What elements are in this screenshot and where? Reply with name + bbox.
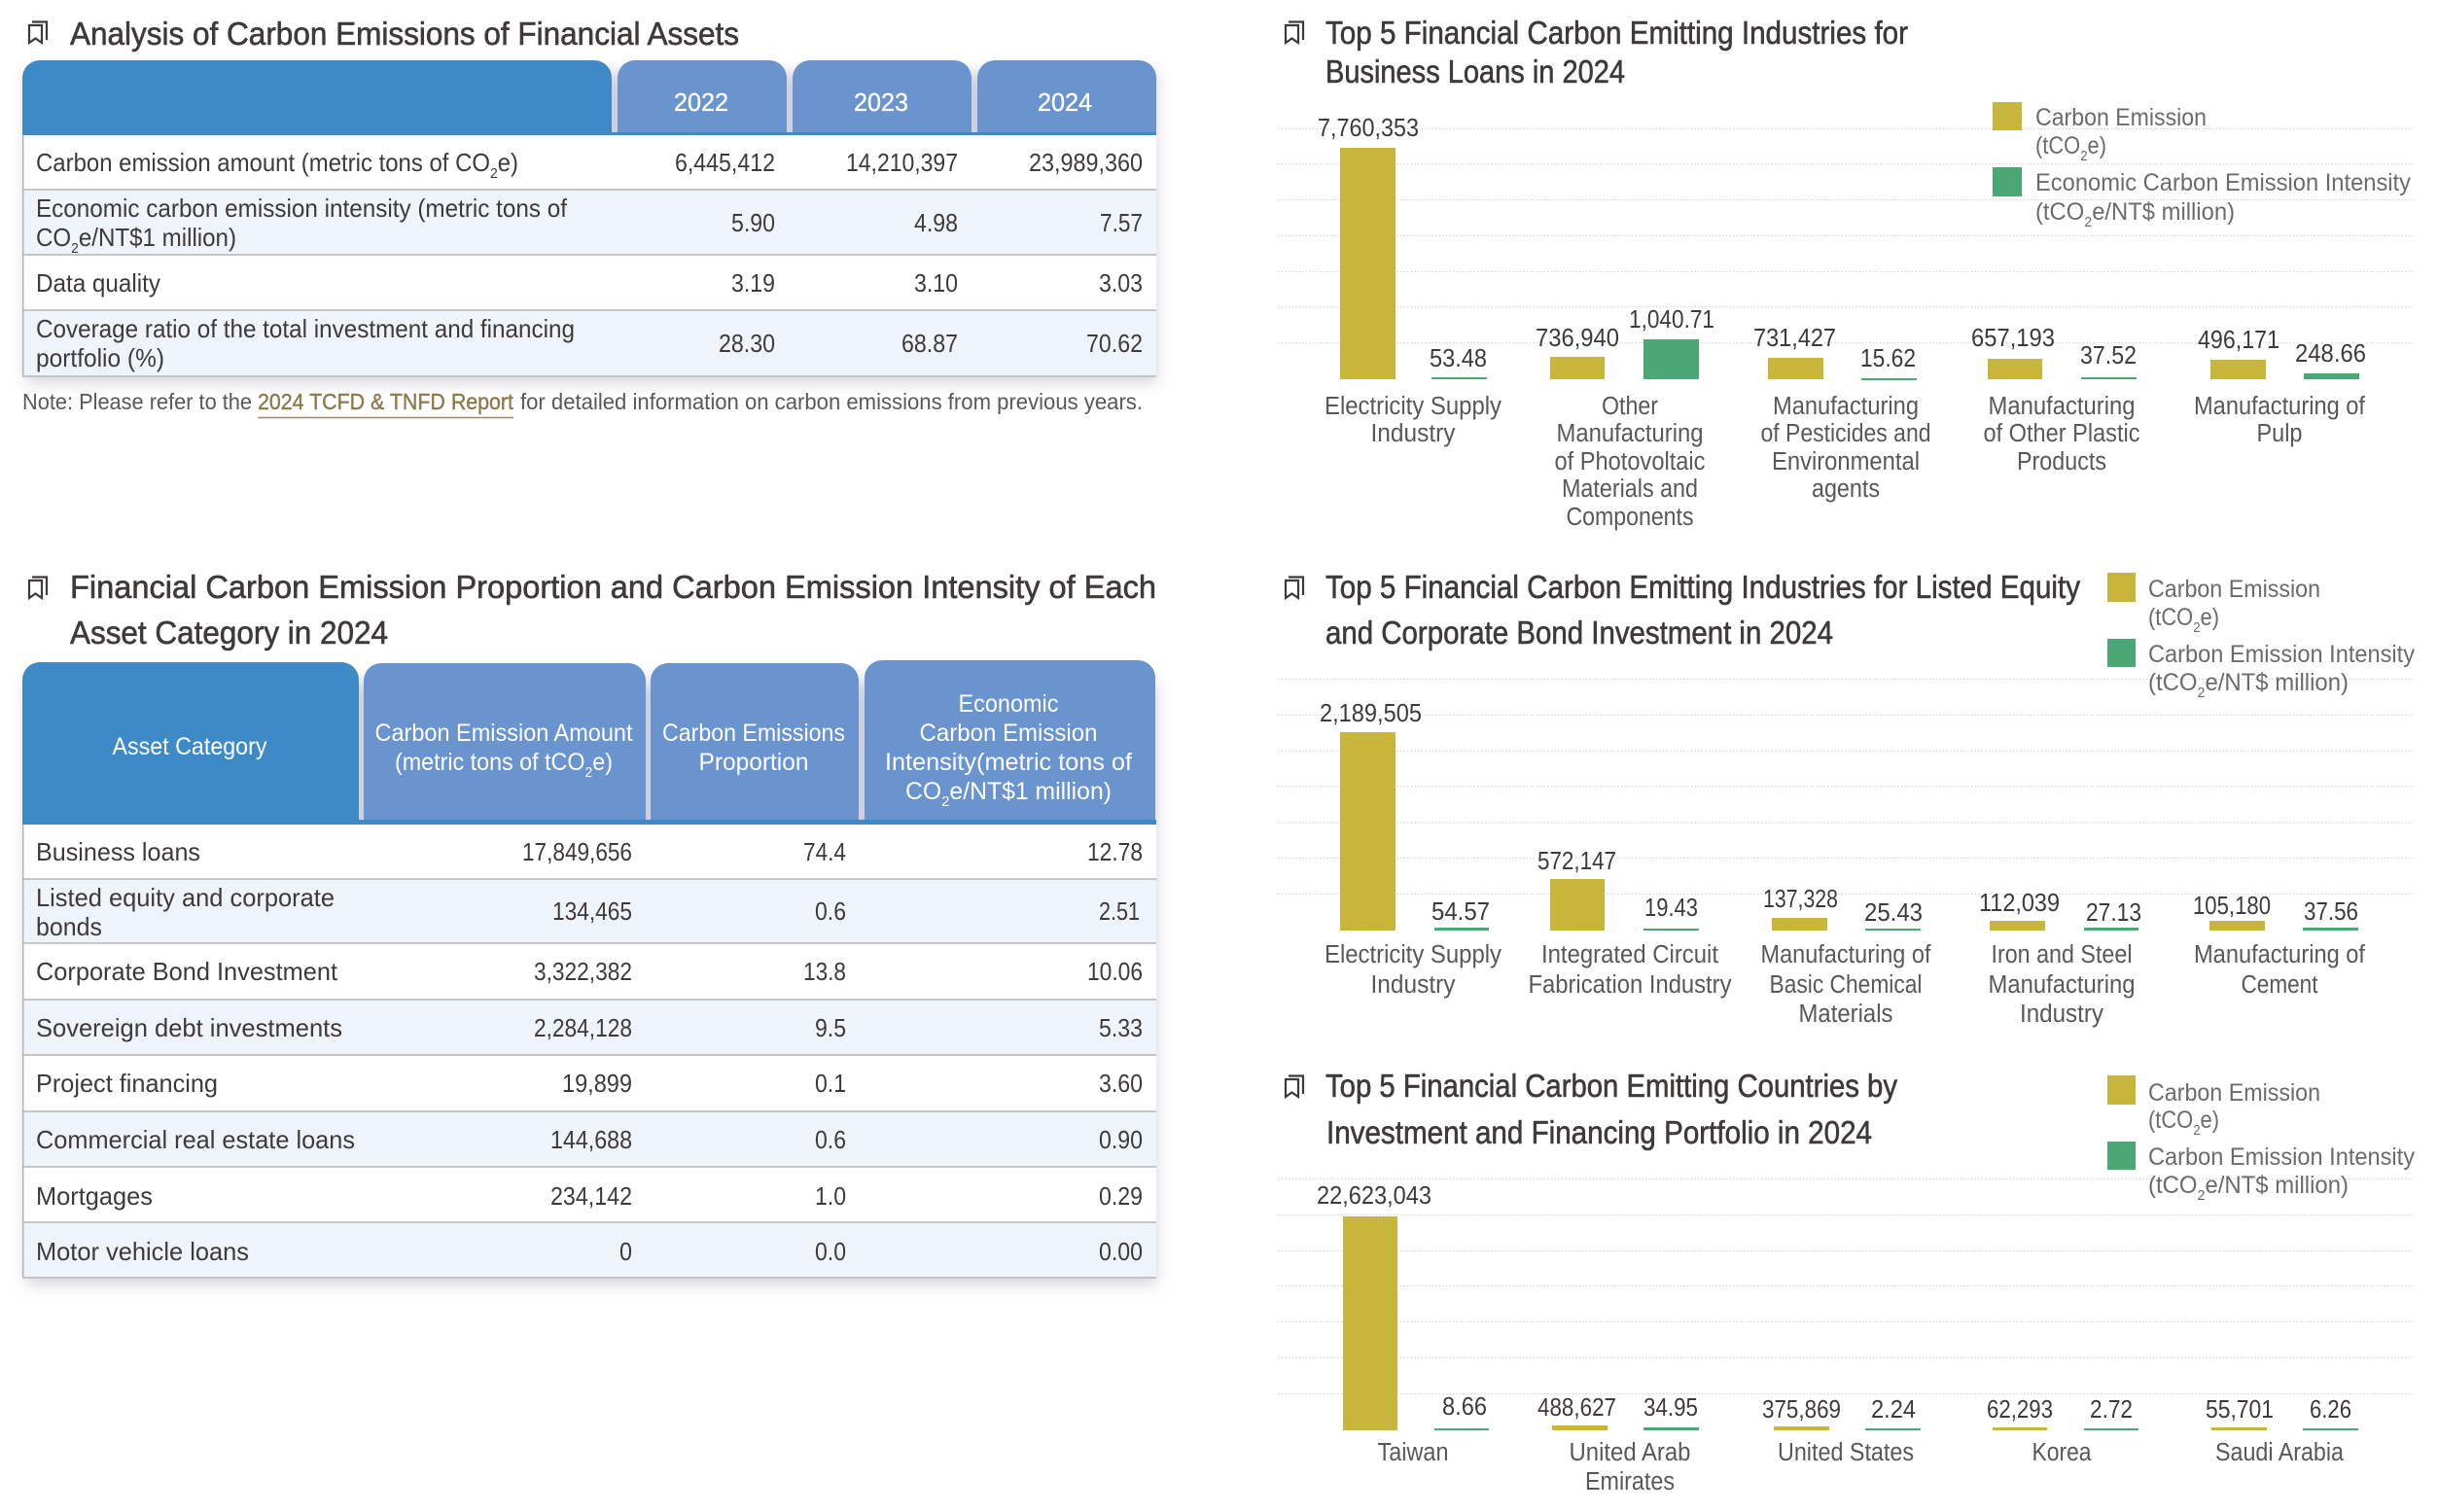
table header row: Carbon Emission Amount bbox=[375, 720, 633, 747]
bars: basic chemical materials: Manufacturing of bbox=[1760, 941, 1931, 968]
legend: Carbon Emission bbox=[2148, 576, 2320, 603]
panel: top 5 industries for business loans bbox=[1278, 15, 2413, 531]
row: commercial real estate loans bbox=[22, 1111, 1156, 1167]
bars: iron and steel: Industry bbox=[2020, 1001, 2103, 1028]
legend: e) bbox=[2201, 1107, 2219, 1134]
legend: 2 bbox=[2080, 148, 2088, 164]
table header row: 2 bbox=[941, 793, 949, 810]
row: corporate bond investment bbox=[22, 943, 1156, 1000]
row: corporate bond investment: 10.06 bbox=[1087, 957, 1143, 986]
bars: photovoltaic materials: Materials and bbox=[1562, 475, 1698, 503]
bars: electricity supply industry bbox=[1320, 698, 1502, 999]
row: commercial real estate loans: 144,688 bbox=[550, 1125, 632, 1154]
legend: (tCO bbox=[2148, 1107, 2200, 1134]
row: economic carbon emission intensity: CO bbox=[36, 223, 74, 252]
table header row: 2 bbox=[585, 764, 592, 781]
table header row: 2022 bbox=[674, 88, 728, 117]
note: report reference: for detailed information on carbon emissions from previous years. bbox=[520, 389, 1143, 414]
bars: integrated circuit fabrication bbox=[1529, 846, 1732, 999]
row: carbon emission amount: 6,445,412 bbox=[675, 148, 775, 177]
legend: (tCO bbox=[2148, 1172, 2200, 1199]
bars: integrated circuit fabrication: Fabrication Industry bbox=[1529, 971, 1732, 999]
row: commercial real estate loans: 0.6 bbox=[815, 1125, 846, 1154]
row: carbon emission amount: e) bbox=[498, 148, 518, 177]
row: coverage ratio: portfolio (%) bbox=[36, 343, 164, 372]
bars: cement: 37.56 bbox=[2304, 897, 2358, 926]
bars: pesticides and environmental agents: Manufacturing bbox=[1773, 393, 1919, 420]
bars: photovoltaic materials: 736,940 bbox=[1536, 323, 1619, 352]
legend: e/NT$ million) bbox=[2092, 198, 2235, 226]
row: business loans: Business loans bbox=[36, 837, 200, 866]
legend: (tCO bbox=[2035, 132, 2087, 159]
table header row: e) bbox=[592, 749, 613, 776]
bars: basic chemical materials: 25.43 bbox=[1864, 897, 1923, 927]
bars: iron and steel bbox=[1979, 888, 2141, 1028]
bars: united arab emirates: Emirates bbox=[1585, 1468, 1675, 1495]
table header row: (metric tons of tCO bbox=[395, 749, 599, 776]
row: mortgages: Mortgages bbox=[36, 1181, 153, 1211]
legend: (tCO bbox=[2148, 604, 2200, 631]
table header row: Intensity(metric tons of bbox=[885, 749, 1132, 776]
legend: Carbon Emission bbox=[2148, 1079, 2320, 1107]
icon: bookmark bbox=[29, 578, 47, 598]
row: listed equity and corporate bonds: 0.6 bbox=[815, 897, 846, 926]
heading: proportion and intensity: Asset Category in 2024 bbox=[70, 615, 388, 651]
bars: iron and steel: Manufacturing bbox=[1988, 971, 2136, 999]
bars: other plastic products: 37.52 bbox=[2080, 340, 2137, 369]
table header row: Economic bbox=[959, 690, 1058, 718]
bars: pesticides and environmental agents bbox=[1753, 323, 1931, 503]
row: sovereign debt investments: 5.33 bbox=[1099, 1013, 1143, 1042]
legend: (tCO bbox=[2035, 198, 2087, 226]
bars: electricity supply industry bbox=[1318, 113, 1502, 447]
table header row: 2024 bbox=[1038, 88, 1092, 117]
bars: other plastic products: Manufacturing bbox=[1988, 393, 2136, 420]
row: motor vehicle loans: 0.0 bbox=[815, 1237, 846, 1266]
row: data quality bbox=[22, 255, 1156, 310]
row: business loans bbox=[22, 825, 1156, 879]
legend: 2 bbox=[2193, 619, 2201, 636]
note: report reference bbox=[22, 389, 1143, 418]
table: carbon emissions by year bbox=[22, 60, 1156, 382]
panel: top 5 industries for listed equity and corporate bonds bbox=[1278, 569, 2415, 1028]
heading: listed equity chart: Top 5 Financial Carbon Emitting Industries for Listed Equity bbox=[1325, 569, 2080, 605]
bars: integrated circuit fabrication: 572,147 bbox=[1537, 846, 1616, 875]
legend: e) bbox=[2088, 132, 2106, 159]
bars: photovoltaic materials: 1,040.71 bbox=[1629, 304, 1714, 334]
bars: integrated circuit fabrication: 19.43 bbox=[1644, 893, 1698, 922]
bars: korea bbox=[1987, 1394, 2138, 1466]
bars: united arab emirates bbox=[1537, 1392, 1699, 1495]
row: economic carbon emission intensity bbox=[22, 190, 1156, 257]
row: project financing: 19,899 bbox=[562, 1069, 632, 1098]
row: economic carbon emission intensity: 7.57 bbox=[1100, 208, 1143, 237]
legend: Carbon Emission bbox=[2035, 104, 2207, 131]
bars: pesticides and environmental agents: Environmental bbox=[1772, 448, 1920, 475]
table header row: 2023 bbox=[854, 88, 908, 117]
icon: bookmark bbox=[1286, 21, 1303, 43]
row: carbon emission amount: 14,210,397 bbox=[846, 148, 958, 177]
row: corporate bond investment: 3,322,382 bbox=[534, 957, 632, 986]
icon: bookmark bbox=[1286, 1075, 1303, 1097]
bars: united arab emirates: 488,627 bbox=[1537, 1392, 1616, 1422]
row: listed equity and corporate bonds: 134,465 bbox=[552, 897, 632, 926]
bars: taiwan: 8.66 bbox=[1442, 1391, 1487, 1421]
row: economic carbon emission intensity: Economic carbon emission intensity (metric tons of bbox=[36, 193, 568, 223]
row: carbon emission amount: 2 bbox=[490, 165, 498, 182]
bars: iron and steel: Iron and Steel bbox=[1992, 941, 2132, 968]
table header row bbox=[22, 60, 1156, 135]
row: listed equity and corporate bonds bbox=[22, 879, 1156, 943]
heading: business loans chart: Top 5 Financial Carbon Emitting Industries for bbox=[1325, 15, 1908, 51]
bars: taiwan bbox=[1317, 1180, 1489, 1466]
heading: countries chart: Top 5 Financial Carbon Emitting Countries by bbox=[1325, 1068, 1897, 1104]
row: data quality: 3.03 bbox=[1099, 268, 1143, 298]
legend: 2 bbox=[2197, 685, 2205, 701]
row: project financing: Project financing bbox=[36, 1069, 218, 1098]
row: economic carbon emission intensity: 5.90 bbox=[731, 208, 775, 237]
bars: electricity supply industry: Industry bbox=[1371, 420, 1456, 447]
panel: top 5 countries bbox=[1278, 1068, 2415, 1495]
row: coverage ratio: 70.62 bbox=[1086, 329, 1143, 358]
bars: korea: 2.72 bbox=[2090, 1394, 2133, 1424]
row: data quality: Data quality bbox=[36, 268, 160, 298]
bars: pesticides and environmental agents: 15.62 bbox=[1860, 343, 1916, 372]
row: business loans: 12.78 bbox=[1087, 837, 1143, 866]
heading: proportion and intensity bbox=[70, 569, 1156, 651]
legend: Carbon Emission Intensity bbox=[2148, 1143, 2415, 1171]
row: listed equity and corporate bonds: bonds bbox=[36, 912, 102, 941]
table header row: CO bbox=[905, 778, 941, 805]
legend bbox=[1993, 102, 2411, 230]
heading: countries chart bbox=[1325, 1068, 1897, 1150]
row: sovereign debt investments: 9.5 bbox=[815, 1013, 846, 1042]
bars: saudi arabia: 6.26 bbox=[2310, 1394, 2351, 1424]
bars: other plastic products: of Other Plastic bbox=[1984, 420, 2140, 447]
legend: Carbon Emission Intensity bbox=[2148, 641, 2415, 668]
bars: pulp: 248.66 bbox=[2295, 338, 2366, 368]
bars: cement: Cement bbox=[2241, 971, 2318, 999]
bars: cement bbox=[2193, 891, 2366, 999]
bars: pesticides and environmental agents: of Pesticides and bbox=[1760, 420, 1931, 447]
bars: other plastic products: Products bbox=[2017, 448, 2106, 475]
legend bbox=[2107, 573, 2415, 701]
bars: other plastic products: 657,193 bbox=[1971, 323, 2055, 352]
bars: korea: Korea bbox=[2032, 1439, 2092, 1466]
bars: saudi arabia: 55,701 bbox=[2206, 1394, 2274, 1424]
note: report reference: Note: Please refer to the bbox=[22, 389, 252, 414]
row: mortgages bbox=[22, 1167, 1156, 1222]
panel: emission proportion and intensity by asset category bbox=[22, 569, 1156, 1283]
heading: analysis of carbon emissions: Analysis of Carbon Emissions of Financial Assets bbox=[70, 16, 739, 52]
row: data quality: 3.10 bbox=[914, 268, 958, 298]
row: corporate bond investment: Corporate Bond Investment bbox=[36, 957, 338, 986]
heading: business loans chart: Business Loans in 2024 bbox=[1325, 53, 1625, 89]
table header row: Carbon Emissions bbox=[662, 720, 845, 747]
legend: Economic Carbon Emission Intensity bbox=[2035, 169, 2411, 196]
bars: pulp: Manufacturing of bbox=[2194, 393, 2366, 420]
bars: cement: Manufacturing of bbox=[2194, 941, 2366, 968]
row: mortgages: 234,142 bbox=[550, 1181, 632, 1211]
bars: saudi arabia: Saudi Arabia bbox=[2215, 1439, 2345, 1466]
bars: taiwan: 22,623,043 bbox=[1317, 1180, 1431, 1210]
bars: pulp: Pulp bbox=[2256, 420, 2303, 447]
bars: united states: 2.24 bbox=[1871, 1394, 1916, 1424]
bars: electricity supply industry: 2,189,505 bbox=[1320, 698, 1422, 727]
bars: pesticides and environmental agents: 731,427 bbox=[1753, 323, 1836, 352]
row: commercial real estate loans: Commercial real estate loans bbox=[36, 1125, 355, 1154]
heading: proportion and intensity: Financial Carbon Emission Proportion and Carbon Emission Intensity of Each bbox=[70, 569, 1156, 605]
row: coverage ratio: 68.87 bbox=[901, 329, 958, 358]
bars: pulp bbox=[2194, 325, 2366, 447]
row: listed equity and corporate bonds: Listed equity and corporate bbox=[36, 883, 335, 912]
bars: photovoltaic materials bbox=[1536, 304, 1714, 531]
bars: electricity supply industry: Industry bbox=[1371, 971, 1456, 999]
row: coverage ratio bbox=[22, 310, 1156, 376]
row: carbon emission amount: Carbon emission amount (metric tons of CO bbox=[36, 148, 529, 177]
bars: photovoltaic materials: Manufacturing bbox=[1556, 420, 1704, 447]
row: project financing bbox=[22, 1055, 1156, 1111]
bars: pulp: 496,171 bbox=[2198, 325, 2279, 354]
legend: 2 bbox=[2197, 1187, 2205, 1204]
table header row: e/NT$1 million) bbox=[949, 778, 1112, 805]
row: corporate bond investment: 13.8 bbox=[803, 957, 846, 986]
legend: (tCO bbox=[2148, 669, 2200, 696]
row: sovereign debt investments: 2,284,128 bbox=[534, 1013, 632, 1042]
row: mortgages: 1.0 bbox=[815, 1181, 846, 1211]
row: listed equity and corporate bonds: 2.51 bbox=[1099, 897, 1140, 926]
row: motor vehicle loans: 0 bbox=[619, 1237, 632, 1266]
bars: electricity supply industry: 53.48 bbox=[1430, 343, 1487, 372]
row: economic carbon emission intensity: e/NT$1 million) bbox=[79, 223, 236, 252]
heading: business loans chart bbox=[1325, 15, 1908, 89]
bars: integrated circuit fabrication: Integrated Circuit bbox=[1541, 941, 1718, 968]
bars: basic chemical materials: Materials bbox=[1799, 1001, 1892, 1028]
legend: e/NT$ million) bbox=[2205, 1172, 2349, 1199]
row: commercial real estate loans: 0.90 bbox=[1099, 1125, 1143, 1154]
row: data quality: 3.19 bbox=[731, 268, 775, 298]
bars: basic chemical materials bbox=[1760, 884, 1931, 1028]
icon: bookmark bbox=[29, 21, 47, 43]
table header row: Asset Category bbox=[113, 733, 267, 760]
row: economic carbon emission intensity: 4.98 bbox=[914, 208, 958, 237]
legend: e/NT$ million) bbox=[2205, 669, 2349, 696]
row: motor vehicle loans bbox=[22, 1222, 1156, 1278]
bars: saudi arabia bbox=[2206, 1394, 2358, 1466]
note: report reference: 2024 TCFD & TNFD Report bbox=[258, 389, 514, 414]
bars: electricity supply industry: 54.57 bbox=[1431, 897, 1490, 926]
bars: taiwan: Taiwan bbox=[1377, 1439, 1449, 1466]
bars: basic chemical materials: Basic Chemical bbox=[1770, 971, 1922, 999]
row: project financing: 0.1 bbox=[815, 1069, 846, 1098]
bars: photovoltaic materials: Components bbox=[1566, 504, 1694, 531]
row: business loans: 17,849,656 bbox=[522, 837, 632, 866]
row: carbon emission amount: 23,989,360 bbox=[1029, 148, 1143, 177]
bars: other plastic products bbox=[1971, 323, 2140, 475]
bars: electricity supply industry: 7,760,353 bbox=[1318, 113, 1419, 142]
bars: cement: 105,180 bbox=[2193, 891, 2271, 920]
row: sovereign debt investments: Sovereign debt investments bbox=[36, 1013, 342, 1042]
row: motor vehicle loans: 0.00 bbox=[1099, 1237, 1143, 1266]
legend: 2 bbox=[2193, 1122, 2201, 1139]
bars: basic chemical materials: 137,328 bbox=[1763, 884, 1838, 913]
icon: bookmark bbox=[1286, 578, 1303, 598]
row: business loans: 74.4 bbox=[803, 837, 846, 866]
row: mortgages: 0.29 bbox=[1099, 1181, 1143, 1211]
bars: united states: United States bbox=[1778, 1439, 1914, 1466]
table: asset categories bbox=[22, 660, 1156, 1283]
row: economic carbon emission intensity: 2 bbox=[71, 240, 79, 257]
row: project financing: 3.60 bbox=[1099, 1069, 1143, 1098]
bars: united arab emirates: 34.95 bbox=[1643, 1392, 1698, 1422]
bars: photovoltaic materials: of Photovoltaic bbox=[1554, 448, 1706, 475]
legend: e) bbox=[2201, 604, 2219, 631]
table header row: Proportion bbox=[698, 749, 809, 776]
row: coverage ratio: 28.30 bbox=[719, 329, 775, 358]
heading: listed equity chart bbox=[1325, 569, 2080, 651]
row: sovereign debt investments bbox=[22, 1000, 1156, 1055]
bars: korea: 62,293 bbox=[1987, 1394, 2053, 1424]
bars: united states bbox=[1762, 1394, 1921, 1466]
row: motor vehicle loans: Motor vehicle loans bbox=[36, 1237, 249, 1266]
panel: analysis of carbon emissions of financial assets bbox=[22, 16, 1156, 418]
heading: listed equity chart: and Corporate Bond Investment in 2024 bbox=[1325, 615, 1833, 651]
bars: pesticides and environmental agents: agents bbox=[1812, 475, 1880, 503]
row: carbon emission amount bbox=[22, 135, 1156, 190]
table header row: Carbon Emission bbox=[920, 720, 1097, 747]
bars: united states: 375,869 bbox=[1762, 1394, 1841, 1424]
heading: countries chart: Investment and Financing Portfolio in 2024 bbox=[1326, 1114, 1872, 1150]
bars: iron and steel: 112,039 bbox=[1979, 888, 2060, 917]
bars: iron and steel: 27.13 bbox=[2086, 897, 2141, 927]
table header row bbox=[22, 660, 1156, 825]
legend bbox=[2107, 1075, 2415, 1204]
bars: electricity supply industry: Electricity Supply bbox=[1325, 941, 1502, 968]
bars: united arab emirates: United Arab bbox=[1570, 1439, 1690, 1466]
legend: 2 bbox=[2084, 214, 2092, 230]
row: coverage ratio: Coverage ratio of the total investment and financing bbox=[36, 314, 575, 343]
bars: photovoltaic materials: Other bbox=[1602, 393, 1658, 420]
bars: electricity supply industry: Electricity Supply bbox=[1325, 393, 1502, 420]
